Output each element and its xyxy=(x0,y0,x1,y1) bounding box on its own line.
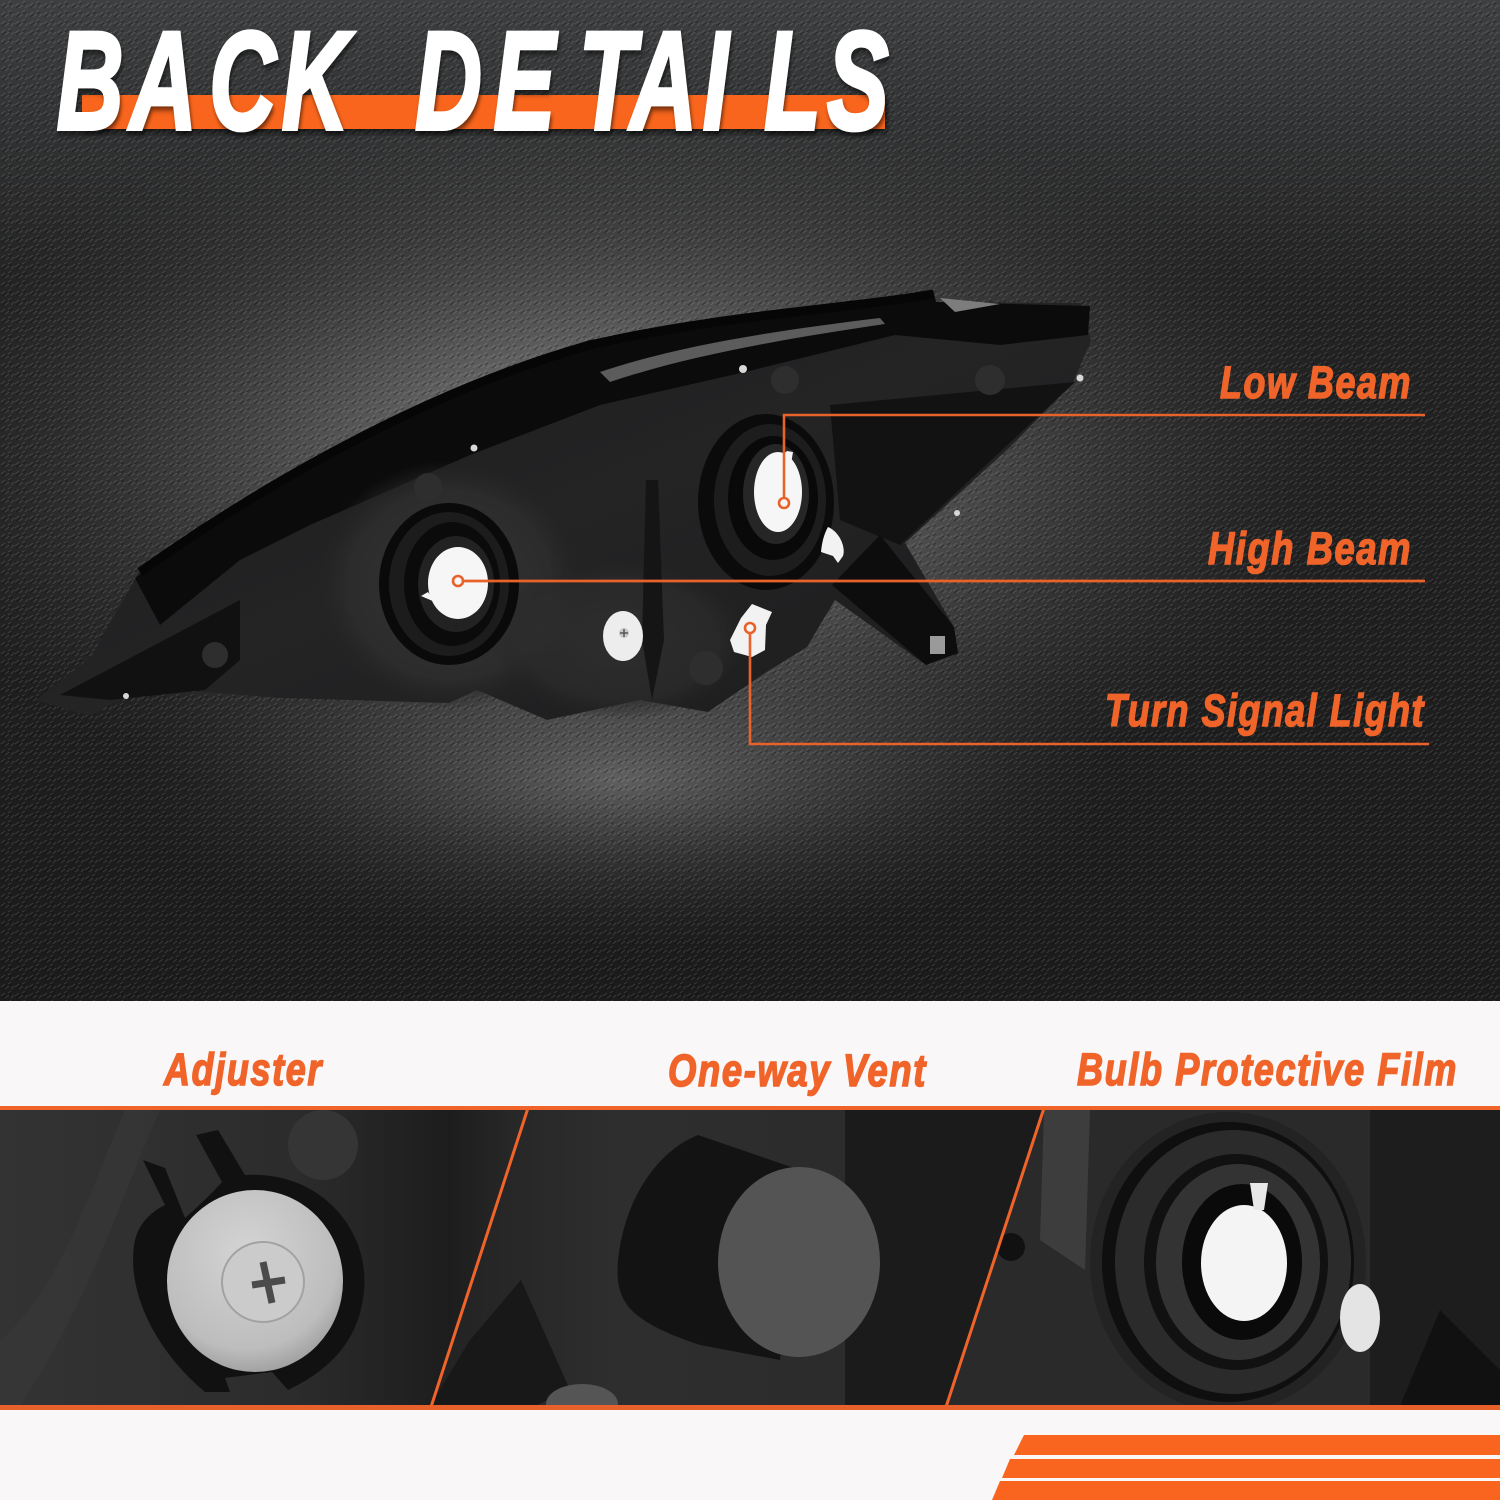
gasket rings xyxy=(1090,1112,1366,1412)
small white film xyxy=(1340,1284,1380,1352)
vent body xyxy=(618,1135,800,1360)
label: one-way vent: One-way Vent xyxy=(668,1045,927,1096)
housing body xyxy=(36,290,1091,720)
lower body light area xyxy=(490,560,750,720)
small white film behind low beam xyxy=(821,527,844,563)
low beam gasket and film xyxy=(698,414,834,590)
label: adjuster: Adjuster xyxy=(163,1044,323,1095)
screw head xyxy=(222,1242,304,1322)
white lower band xyxy=(0,1001,1500,1500)
rubber seal along top edge xyxy=(140,294,933,572)
vertical post xyxy=(642,480,664,700)
right bracket xyxy=(1400,1310,1500,1406)
fastener bosses xyxy=(202,365,1005,685)
turn signal white film xyxy=(730,604,772,657)
high beam gasket and film xyxy=(379,503,519,665)
left corner shadow xyxy=(60,600,240,700)
callout: low beam: Low Beam xyxy=(1220,357,1412,408)
side screw boss xyxy=(997,1233,1025,1261)
vent cap xyxy=(718,1167,880,1357)
bottom-left dark wedge xyxy=(430,1280,570,1406)
dark triangular back panel xyxy=(830,382,1075,545)
lens strip between seal and trim xyxy=(600,318,885,382)
metal disc xyxy=(167,1190,343,1372)
adjuster screw xyxy=(603,611,643,661)
black retaining ring xyxy=(133,1130,364,1392)
headlight back view xyxy=(36,290,1091,720)
callout: high beam: High Beam xyxy=(1208,523,1412,574)
cross recess xyxy=(252,1262,285,1303)
lobe behind high beam xyxy=(315,460,585,710)
photo panel: one-way vent xyxy=(430,1110,1050,1424)
orange frame lines and diagonal dividers xyxy=(0,1106,1500,1410)
black band under top edge xyxy=(135,290,1090,625)
dark textured background xyxy=(0,0,1500,1001)
decorative corner stripes xyxy=(992,1435,1500,1500)
lens corner glimpse upper right xyxy=(940,298,1000,312)
callout: high beam xyxy=(453,523,1425,586)
title: BACK DETAILS: BACK DETAILS xyxy=(57,4,889,160)
callout: turn signal light: Turn Signal Light xyxy=(1105,685,1425,736)
callout: turn signal light xyxy=(745,623,1429,744)
side bracket xyxy=(832,535,958,665)
photo panel: adjuster xyxy=(0,1110,530,1406)
callout: low beam xyxy=(779,357,1425,508)
white film xyxy=(1201,1205,1287,1321)
small knob xyxy=(546,1384,618,1405)
mounting clip xyxy=(930,636,945,654)
screws xyxy=(123,365,1084,699)
photo panel: bulb protective film xyxy=(940,1110,1500,1412)
